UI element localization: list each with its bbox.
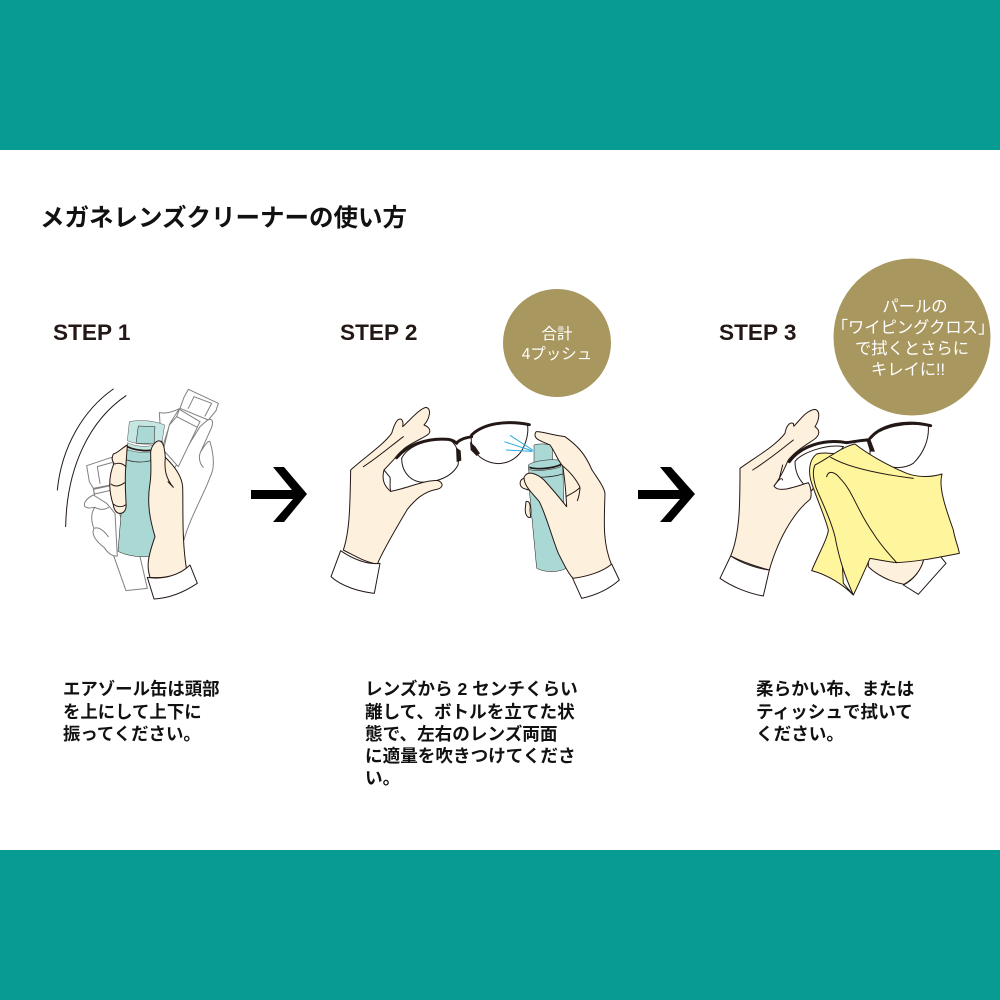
callout: pearl wiping cloth (832, 258, 994, 416)
description: step 2: 離して、ボトルを立てた状 (365, 702, 575, 722)
description: step 2: 態で、左右のレンズ両面 (365, 724, 557, 744)
hand (110, 441, 197, 599)
description: step 2: レンズから 2 センチくらい (365, 679, 578, 699)
illustration: shaking the can (57, 389, 218, 599)
illustration: spraying the lens (331, 407, 619, 598)
top teal band (0, 0, 1000, 150)
ghost hand and bottle, left (84, 457, 147, 591)
hand (720, 409, 819, 596)
description: step 1: を上にして上下に (63, 702, 202, 722)
description: step 1: 振ってください。 (63, 724, 201, 744)
description: step 1: エアゾール缶は頭部 (63, 679, 220, 699)
description: step 2: い。 (365, 768, 400, 788)
heading: step 2: STEP 2 (340, 320, 417, 345)
description: step 3 (756, 679, 914, 744)
left hand (331, 407, 442, 593)
back hand under cloth (868, 557, 946, 594)
cloth (810, 444, 959, 595)
glasses (789, 423, 931, 491)
callout: pearl wiping cloth: パールの (882, 298, 948, 316)
heading: step 1: STEP 1 (53, 320, 130, 345)
spray lines (504, 435, 533, 451)
ghost hand and bottle, right (159, 389, 218, 540)
bottle (528, 444, 566, 572)
callout: pearl wiping cloth: 「ワイピングクロス」 (832, 319, 994, 337)
description: step 3: ください。 (756, 724, 844, 744)
fingers behind bottle (520, 478, 531, 517)
callout: pearl wiping cloth: で拭くとさらに (855, 340, 969, 358)
heading: step 3: STEP 3 (719, 320, 796, 345)
description: step 3: 柔らかい布、または (756, 679, 914, 699)
bottle (118, 421, 165, 557)
description: step 2: に適量を吹きつけてくださ (365, 746, 576, 766)
description: step 1 (63, 679, 220, 744)
motion arcs (57, 389, 126, 527)
description: step 3: ティッシュで拭いて (756, 702, 913, 722)
bottom teal band (0, 850, 1000, 1000)
glasses (397, 423, 529, 482)
description: step 2 (365, 679, 578, 788)
callout: 4 pushes: 4プッシュ (522, 345, 592, 363)
callout: pearl wiping cloth: キレイに!! (871, 361, 945, 379)
panel: step 3 (719, 258, 994, 744)
illustration: wiping with a cloth (720, 409, 959, 596)
title: メガネレンズクリーナーの使い方 (40, 203, 407, 232)
arrow: step 1 to step 2 (251, 467, 307, 522)
callout: 4 pushes (503, 289, 611, 397)
right hand (524, 432, 619, 598)
arrow: step 2 to step 3 (638, 467, 695, 522)
callout: 4 pushes: 合計 (541, 325, 573, 343)
panel: step 1 (53, 320, 220, 744)
panel: step 2 (331, 289, 619, 788)
